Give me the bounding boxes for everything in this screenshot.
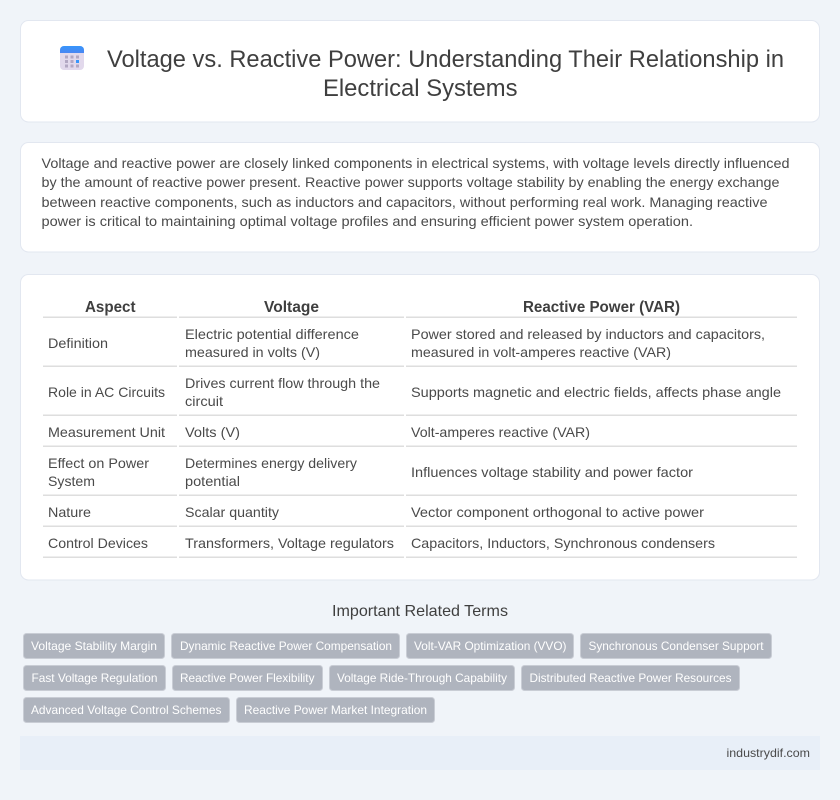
tag: Advanced Voltage Control Schemes: [31, 703, 222, 717]
footer: [20, 736, 820, 770]
intro paragraph: [42, 155, 789, 229]
row: measurement unit: Measurement Unit: [48, 424, 165, 440]
row: effect on power system: potential: [185, 473, 240, 489]
panel: comparison table: [20, 274, 820, 580]
row: nature: [43, 504, 797, 527]
table header row: Reactive Power (VAR): [523, 299, 680, 316]
intro paragraph: by the amount of reactive power present. Reactive power supports voltage stability by enabling the energy exchange: [42, 174, 780, 190]
title: Voltage vs. Reactive Power: Understanding Their Relationship in: [107, 46, 784, 73]
row: effect on power system: System: [48, 473, 95, 489]
tag: Distributed Reactive Power Resources: [530, 671, 732, 685]
tag: [24, 666, 166, 690]
panel: introduction: [20, 142, 820, 252]
row: control devices: Transformers, Voltage regulators: [185, 535, 394, 551]
tag: [172, 634, 400, 658]
row: definition: Power stored and released by inductors and capacitors,: [411, 326, 765, 342]
tag: [24, 698, 230, 722]
heading: important related terms: Important Related Terms: [332, 603, 508, 620]
tag: Synchronous Condenser Support: [588, 639, 764, 653]
tag: Reactive Power Flexibility: [180, 671, 314, 685]
table header row: Voltage: [264, 299, 319, 316]
row: effect on power system: Effect on Power: [48, 455, 149, 471]
source credit: industrydif.com: [726, 746, 810, 760]
row: measurement unit: [43, 424, 797, 447]
tag: [580, 634, 772, 658]
title: Electrical Systems: [323, 75, 518, 102]
tag: Fast Voltage Regulation: [32, 671, 158, 685]
row: role in AC circuits: Drives current flow through the: [185, 375, 380, 391]
intro paragraph: Voltage and reactive power are closely linked components in electrical systems, with voltage levels directly influenced: [42, 155, 789, 171]
tag: [522, 666, 740, 690]
row: definition: [43, 326, 797, 367]
tag: Voltage Stability Margin: [31, 639, 157, 653]
panel: header: [20, 20, 820, 122]
tag: Voltage Ride-Through Capability: [337, 671, 507, 685]
row: control devices: Control Devices: [48, 535, 148, 551]
row: definition: measured in volt-amperes reactive (VAR): [411, 344, 671, 360]
row: effect on power system: Determines energy delivery: [185, 455, 357, 471]
title: [107, 46, 784, 102]
tag: [24, 634, 164, 658]
row: measurement unit: Volts (V): [185, 424, 240, 440]
row: nature: Vector component orthogonal to active power: [411, 504, 704, 520]
intro paragraph: between reactive components, such as inductors and capacitors, without performing real work. Managing reactive: [42, 194, 768, 210]
row: role in AC circuits: [43, 375, 797, 416]
row: effect on power system: Influences voltage stability and power factor: [411, 464, 693, 480]
row: role in AC circuits: circuit: [185, 393, 223, 409]
tag: [330, 666, 514, 690]
tag: Dynamic Reactive Power Compensation: [180, 639, 392, 653]
row: role in AC circuits: Role in AC Circuits: [48, 384, 165, 400]
table header row: [43, 299, 797, 318]
row: definition: Electric potential difference: [185, 326, 359, 342]
tag: Volt-VAR Optimization (VVO): [414, 639, 566, 653]
row: control devices: Capacitors, Inductors, Synchronous condensers: [411, 535, 715, 551]
tag: [406, 634, 574, 658]
row: control devices: [43, 535, 797, 558]
intro paragraph: power is critical to maintaining optimal voltage profiles and ensuring efficient power system operation.: [42, 213, 693, 229]
row: effect on power system: [43, 455, 797, 496]
row: definition: Definition: [48, 335, 108, 351]
tag: [236, 698, 434, 722]
table header row: Aspect: [85, 299, 136, 316]
row: role in AC circuits: Supports magnetic and electric fields, affects phase angle: [411, 384, 781, 400]
row: measurement unit: Volt-amperes reactive (VAR): [411, 424, 590, 440]
row: nature: Nature: [48, 504, 91, 520]
tag: [172, 666, 322, 690]
tag: Reactive Power Market Integration: [244, 703, 427, 717]
icon: calendar: [60, 46, 84, 70]
row: nature: Scalar quantity: [185, 504, 279, 520]
row: definition: measured in volts (V): [185, 344, 320, 360]
related term tags: [24, 634, 772, 722]
